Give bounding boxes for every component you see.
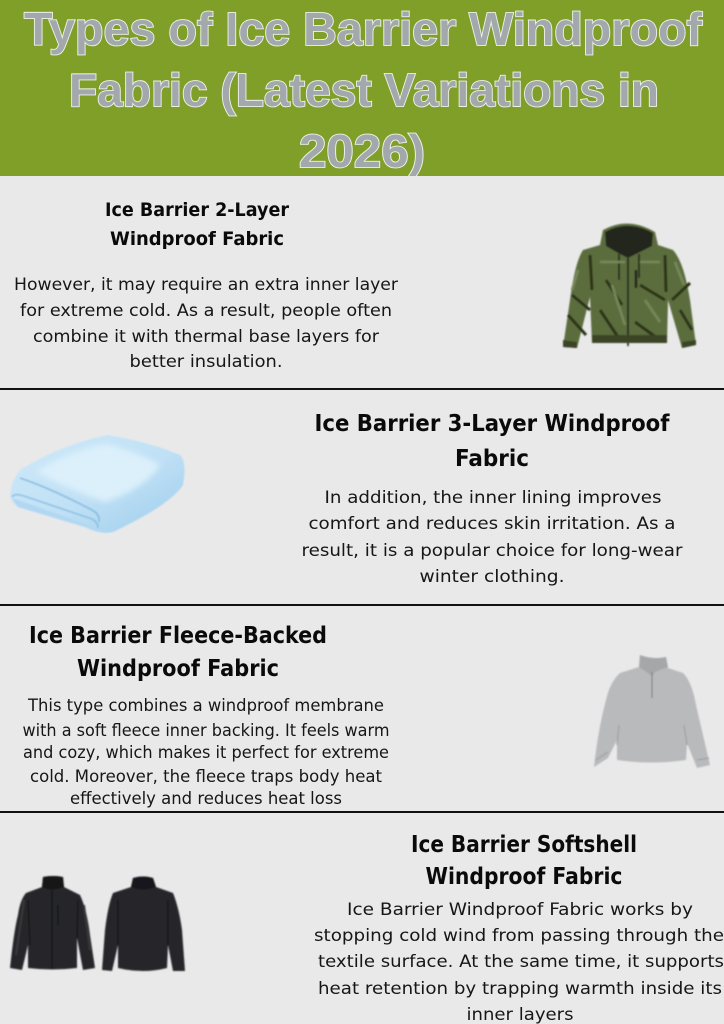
text: fleece description: and cozy, which makes it perfect for extreme: [23, 743, 389, 763]
title: Types of Ice Barrier Windproof: [24, 3, 703, 55]
panel: fleece-backed fabric: [22, 623, 710, 809]
panel: 3-layer fabric: [10, 411, 683, 587]
heading: 2-layer: Windproof Fabric: [110, 228, 284, 250]
heading: fleece-backed: Ice Barrier Fleece-Backed: [29, 623, 327, 649]
text: 2-layer description: [14, 275, 398, 372]
header banner: [0, 0, 724, 177]
heading: 2-layer: [105, 199, 290, 250]
text: 2-layer description: better insulation.: [130, 352, 282, 372]
text: softshell description: textile surface. At the same time, it supports: [318, 952, 724, 972]
text: 3-layer description: [302, 488, 683, 587]
title: 2026): [299, 125, 425, 177]
text: 3-layer description: winter clothing.: [420, 567, 564, 587]
icon: black softshell jacket back: [102, 876, 185, 971]
heading: fleece-backed: Windproof Fabric: [77, 656, 279, 682]
divider 1: [0, 388, 724, 390]
text: fleece description: with a soft fleece inner backing. It feels warm: [22, 721, 390, 741]
text: 3-layer description: result, it is a popular choice for long-wear: [302, 541, 683, 561]
text: softshell description: heat retention by trapping warmth inside its: [318, 979, 722, 999]
heading: fleece-backed: [29, 623, 327, 682]
heading: softshell: Windproof Fabric: [426, 864, 622, 890]
text: fleece description: [22, 696, 390, 809]
text: 2-layer description: However, it may require an extra inner layer: [14, 275, 398, 295]
text: 3-layer description: comfort and reduces skin irritation. As a: [308, 514, 676, 534]
title: [24, 3, 703, 177]
text: softshell description: Ice Barrier Windproof Fabric works by: [347, 900, 693, 920]
text: softshell description: stopping cold wind from passing through the: [314, 926, 724, 946]
heading: 3-layer: [314, 411, 670, 472]
icon: grey fleece pullover: [594, 655, 710, 768]
panel: softshell fabric: [10, 832, 724, 1024]
divider 2: [0, 604, 724, 606]
text: 2-layer description: combine it with thermal base layers for: [33, 327, 379, 347]
text: fleece description: effectively and reduces heat loss: [70, 789, 342, 809]
heading: 3-layer: Ice Barrier 3-Layer Windproof: [314, 411, 670, 437]
icon: green hooded jacket: [563, 223, 696, 348]
divider 3: [0, 811, 724, 813]
heading: softshell: Ice Barrier Softshell: [411, 832, 637, 858]
text: fleece description: cold. Moreover, the fleece traps body heat: [30, 767, 382, 787]
text: softshell description: [314, 900, 724, 1024]
heading: 2-layer: Ice Barrier 2-Layer: [105, 199, 290, 221]
icon: black softshell jacket front: [10, 876, 95, 970]
title: Fabric (Latest Variations in: [69, 64, 659, 116]
heading: 3-layer: Fabric: [455, 446, 529, 472]
icon: folded blue blanket: [10, 435, 184, 533]
text: fleece description: This type combines a windproof membrane: [27, 696, 384, 716]
text: 2-layer description: for extreme cold. As a result, people often: [20, 301, 392, 321]
heading: softshell: [411, 832, 637, 890]
text: 3-layer description: In addition, the inner lining improves: [324, 488, 662, 508]
panel: 2-layer fabric: [0, 176, 724, 388]
